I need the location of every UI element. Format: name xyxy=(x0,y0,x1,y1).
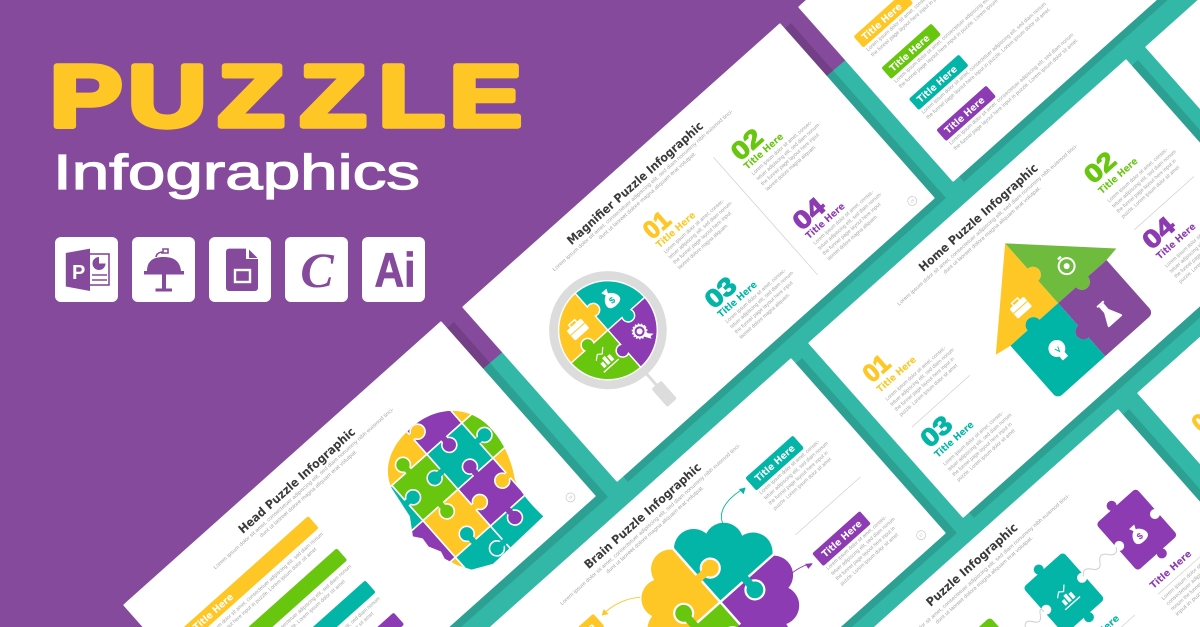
icon: money bag: $ xyxy=(607,295,617,306)
block 01 xyxy=(638,167,744,272)
icon: light bulb xyxy=(1045,336,1072,364)
teal title card: Title Here xyxy=(753,443,798,485)
icon: medal xyxy=(630,320,655,346)
block 03: the funnel page layout here input xyxy=(734,280,795,335)
block 03: Lorem ipsum dolor sit amet, consec- xyxy=(942,410,1005,467)
brain jigsaw illustration xyxy=(641,522,800,627)
teal title card: tetuer adipiscing elit, sed diam nonum xyxy=(763,441,830,501)
teal title bar xyxy=(240,580,387,627)
icon: stopwatch xyxy=(1053,252,1078,277)
page number: head slide: 28 xyxy=(568,495,574,500)
block 04: the funnel page layout here input xyxy=(822,201,883,257)
block 03: tetuer adipiscing elit, sed diam nonum xyxy=(947,412,1014,473)
house jigsaw illustration xyxy=(945,190,1165,410)
block 01: Title Here xyxy=(875,354,919,395)
icon: bar chart xyxy=(591,344,619,373)
block 02: Title Here xyxy=(742,131,786,172)
icon: bar chart xyxy=(1052,582,1080,610)
purple title card: the funnel page layout here input in xyxy=(835,526,897,582)
step label: purple: Title Here xyxy=(1148,549,1194,591)
page number: head slide xyxy=(564,491,577,504)
block 01: 01 xyxy=(638,206,676,245)
icon: Google Slides xyxy=(209,237,271,302)
block 01: Lorem ipsum dolor sit amet, consec- xyxy=(885,345,948,402)
teal title card: the funnel page layout here input in xyxy=(768,450,830,506)
block 01: tetuer adipiscing elit, sed diam nonum- xyxy=(668,200,734,261)
block 01: the funnel page layout here input in xyxy=(894,356,956,413)
puzzle piece: teal xyxy=(575,260,651,337)
arrow: teal xyxy=(713,485,753,523)
block 04: laoreet dolore magna aliquam. xyxy=(826,214,879,262)
icon: money bag xyxy=(598,286,622,311)
panel: home puzzle slide xyxy=(808,59,1200,518)
block 04: Title Here xyxy=(804,201,848,242)
block 02: puzzle. Lorem ipsum dolor sit amet xyxy=(1120,165,1181,220)
icon: briefcase xyxy=(1007,294,1032,319)
purple title card xyxy=(812,497,906,588)
icon: money bag: $ xyxy=(1135,531,1145,542)
purple tag: Lorem ipsum dolor sit amet, consectetuer adipiscing elit, sed diam nonum xyxy=(948,32,1076,147)
brain lobes xyxy=(641,522,800,627)
panel: magnifier puzzle slide xyxy=(462,23,935,482)
wavy connectors xyxy=(1008,544,1119,627)
block 02 xyxy=(1079,112,1187,220)
block 03: Title Here xyxy=(933,419,976,460)
block 03: tetuer adipiscing elit, sed diam nonum- xyxy=(729,270,796,330)
block 01: puzzle. Lorem ipsum dolor sit amet xyxy=(898,363,959,418)
puzzle piece: green xyxy=(565,323,641,400)
icon: money bag xyxy=(1126,522,1150,546)
block 04: Title Here xyxy=(1155,221,1198,262)
block 01: the funnel page layout here input xyxy=(672,210,733,266)
puzzle piece: yellow xyxy=(538,287,615,363)
block 03: Title Here xyxy=(716,279,760,320)
heading: head puzzle: Head Puzzle Infographic xyxy=(236,425,358,536)
page number: magnifier slide xyxy=(906,195,919,207)
block 03: the funnel page layout here input in xyxy=(951,421,1014,478)
block 03: 03 xyxy=(915,410,958,453)
arrow: yellow xyxy=(599,586,640,625)
teal tag: the funnel page layout here input in puzzle. Lorem ipsum dolor sit amet. xyxy=(925,7,1052,121)
block 02 xyxy=(726,89,831,193)
house piece: purple xyxy=(1052,260,1154,362)
block 02: laoreet dolore magna aliquam. xyxy=(765,144,818,193)
block 02: tetuer adipiscing elit, sed diam nonum- xyxy=(755,122,822,182)
house piece: teal xyxy=(1005,297,1105,399)
purple title card: Title Here xyxy=(820,519,864,560)
block 01: laoreet dolore magna aliquam. xyxy=(677,223,730,271)
puzzle piece: green xyxy=(945,611,1037,627)
subtitle: magnifier puzzle: Lorem ipsum dolor sit amet, consectetuer adipiscing elit, sed diam nonummy nibh euismod tinci- xyxy=(552,109,735,273)
icon: Canva xyxy=(285,237,348,302)
subtitle: head puzzle: Lorem ipsum dolor sit amet, consectetuer adipiscing elit, sed diam nonummy nibh euismod tinci- xyxy=(213,407,396,571)
magnifier ring xyxy=(531,253,685,407)
block 02: tetuer adipiscing elit, sed diam nonum xyxy=(1111,149,1178,209)
subtitle: home puzzle: Lorem ipsum dolor sit amet, consectetuer adipiscing elit, sed diam nonummy nibh euismod tinci- xyxy=(896,143,1079,307)
step label: teal xyxy=(1076,604,1135,627)
panel: right slide fragment bottom xyxy=(1137,109,1200,568)
panel: head puzzle slide xyxy=(123,321,596,627)
block 03: laoreet dolore magna aliquam. xyxy=(738,292,792,341)
puzzle piece: purple xyxy=(601,297,678,373)
block 01: Lorem ipsum dolor sit amet, consec- xyxy=(663,198,726,255)
block 03: Lorem ipsum dolor sit amet, consec- xyxy=(725,268,788,325)
yellow tag: Title Here xyxy=(860,1,904,43)
icon: PowerPoint: P xyxy=(72,262,85,284)
block 03 xyxy=(915,376,1023,483)
block 04: 04 xyxy=(787,192,831,236)
icon: Canva: C xyxy=(300,242,334,298)
heading: magnifier puzzle: Magnifier Puzzle Infographic xyxy=(564,119,706,248)
heading: brain puzzle: Brain Puzzle Infographic xyxy=(581,460,704,572)
green tag: Title Here xyxy=(888,33,932,74)
block 03: 03 xyxy=(699,271,742,314)
subtitle: head puzzle: dunt ut laoreet dolore magna aliquam erat volutpat. xyxy=(259,449,359,539)
house piece: yellow xyxy=(945,238,1064,357)
block 03: puzzle. Lorem ipsum dolor sit amet xyxy=(956,428,1017,483)
block 02: Lorem ipsum dolor sit amet, consec- xyxy=(1106,147,1169,204)
page number: brain slide xyxy=(915,529,927,542)
panel: brain puzzle slide xyxy=(473,358,946,627)
purple tag: Title Here xyxy=(943,95,987,136)
magnifier illustration xyxy=(531,253,713,439)
icon: flask xyxy=(1093,297,1123,328)
step label: purple xyxy=(1148,539,1200,617)
teal tag: Title Here xyxy=(915,64,960,105)
block 02: the funnel page layout here input xyxy=(760,132,821,187)
puzzle piece: purple xyxy=(1090,482,1183,577)
block 01: 01 xyxy=(857,349,896,388)
brain tabs xyxy=(660,542,782,627)
icon: Illustrator xyxy=(362,237,425,302)
subtitle: Infographics: Infographics xyxy=(53,146,420,200)
magnifier handle xyxy=(641,369,677,407)
panel: right slide fragment top xyxy=(1145,0,1200,222)
subtitle: magnifier puzzle: dunt ut laoreet dolore magna aliquam erat volutpat. xyxy=(598,151,698,241)
title: PUZZLE: PUZZLE xyxy=(50,47,522,145)
purple title card: puzzle. Lorem ipsum dolor sit amet xyxy=(839,532,900,587)
block 02: Lorem ipsum dolor sit amet, consec- xyxy=(751,120,814,177)
block 04 xyxy=(1137,178,1200,285)
page number: brain slide: 27 xyxy=(919,533,924,538)
teal title card: Lorem ipsum dolor sit amet, consec- xyxy=(758,439,821,496)
block 02: the funnel page layout here input in xyxy=(1116,158,1178,215)
block 01: Title Here xyxy=(654,210,698,251)
teal tag: Lorem ipsum dolor sit amet, consectetuer adipiscing elit, sed diam nonum xyxy=(921,1,1048,116)
house piece: green xyxy=(1005,190,1123,309)
block 01 xyxy=(857,311,965,418)
block 04: 04 xyxy=(1137,211,1181,255)
heading: home puzzle: Home Puzzle Infographic xyxy=(916,161,1041,274)
panel: title-tags slide xyxy=(798,0,1200,182)
heading: puzzle infographic: Puzzle Infographic xyxy=(923,520,1021,609)
page number: magnifier slide: 29 xyxy=(910,198,915,204)
subtitle: brain puzzle: dunt ut laoreet dolore magna aliquam erat volutpat. xyxy=(605,485,705,575)
teal title card: puzzle. Lorem ipsum dolor sit amet xyxy=(772,456,833,512)
block 02: Title Here xyxy=(1097,156,1140,197)
teal title card xyxy=(745,421,839,512)
subtitle: puzzle infographic: dunt ut laoreet dolore magna aliquam erat volutpat. xyxy=(934,535,1034,626)
block 02: 02 xyxy=(726,123,769,166)
subtitle: brain puzzle: Lorem ipsum dolor sit amet, consectetuer adipiscing elit, sed diam nonummy nibh euismod tinci- xyxy=(559,443,742,607)
icon: Illustrator: Ai xyxy=(374,244,416,298)
purple title bar xyxy=(269,612,411,627)
purple tag: the funnel page layout here input in puzzle. Lorem ipsum dolor sit amet. xyxy=(953,38,1080,152)
block 02: 02 xyxy=(1079,146,1122,189)
block 04: tetuer adipiscing elit, sed diam nonum- xyxy=(817,191,884,252)
purple title card: tetuer adipiscing elit, sed diam nonum xyxy=(830,516,897,577)
block 01: tetuer adipiscing elit, sed diam nonum xyxy=(889,347,956,408)
icon: briefcase xyxy=(565,316,589,341)
icon: PowerPoint xyxy=(55,237,118,302)
purple title card: Lorem ipsum dolor sit amet, consec- xyxy=(825,514,888,572)
icon: Keynote xyxy=(132,237,195,302)
block 04: Lorem ipsum dolor sit amet, consec- xyxy=(812,189,875,246)
block 04 xyxy=(787,158,893,263)
panel: puzzle steps slide xyxy=(800,409,1200,627)
puzzle piece: teal xyxy=(1018,546,1110,627)
arrow: purple xyxy=(785,558,814,586)
head jigsaw illustration xyxy=(388,410,544,570)
subtitle: home puzzle: dunt ut laoreet dolore magna aliquam erat volutpat. xyxy=(942,185,1042,276)
yellow title card xyxy=(546,614,605,627)
block 03 xyxy=(699,237,805,341)
